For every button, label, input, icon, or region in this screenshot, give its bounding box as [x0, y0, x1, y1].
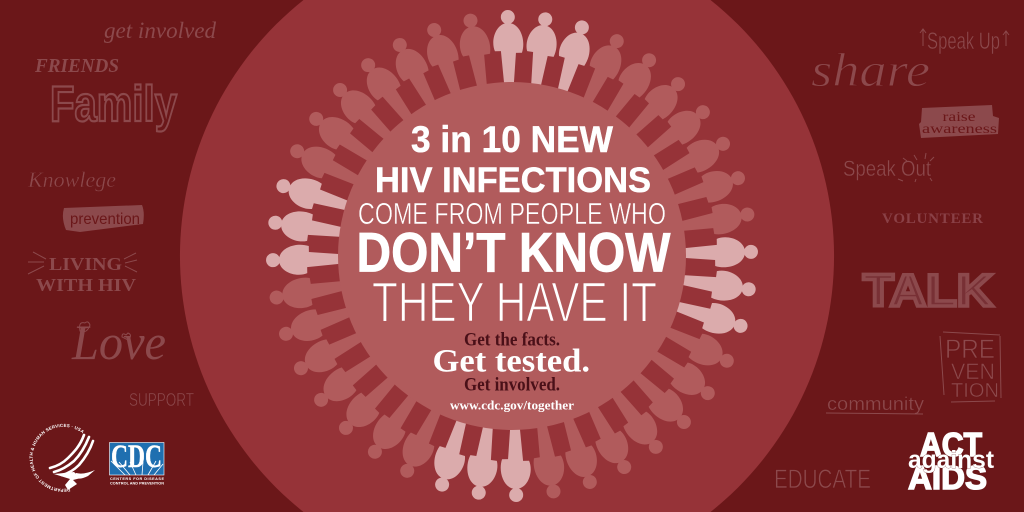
word: raise awareness badge	[919, 105, 999, 138]
word: knowlege: Knowlege	[27, 167, 116, 192]
word: prevention box: PRE	[945, 334, 995, 364]
headline	[356, 119, 671, 334]
word: prevention box: VEN	[951, 359, 995, 384]
word: prevention box	[940, 332, 1001, 402]
word: friends: FRIENDS	[34, 55, 119, 77]
call to action: Get the facts.	[464, 330, 560, 350]
left word cloud	[27, 18, 216, 410]
CDC rays	[111, 461, 163, 475]
word: share: share	[811, 44, 930, 97]
word: get involved: get involved	[104, 18, 216, 43]
call to action: Get involved.	[464, 374, 560, 396]
word: educate: EDUCATE	[774, 464, 871, 494]
word: community: community	[827, 394, 924, 414]
word: speak out: Speak Out	[843, 156, 931, 181]
eagle body	[54, 470, 95, 490]
headline: THEY HAVE IT	[372, 270, 657, 334]
word: family: Family	[50, 76, 177, 132]
headline: DON’T KNOW	[356, 220, 671, 284]
headline: HIV INFECTIONS	[375, 161, 651, 200]
word: prevention badge: prevention	[70, 211, 140, 228]
logo: Act Against AIDS: AIDS	[908, 459, 987, 496]
word: support: SUPPORT	[129, 390, 194, 410]
eagle wing stripes	[50, 435, 93, 475]
call to action: www.cdc.gov/together	[450, 398, 574, 412]
people ring	[266, 10, 758, 502]
logo: Act Against AIDS: ACT	[920, 426, 982, 463]
CDC letters: CDC	[111, 439, 162, 475]
word: prevention badge	[63, 205, 144, 232]
CDC blue square	[110, 442, 164, 475]
right word cloud	[774, 28, 1009, 494]
HHS eagle	[50, 435, 95, 490]
call to action	[432, 330, 590, 412]
logo: Act Against AIDS: against	[908, 446, 995, 474]
word: living with hiv: WITH HIV	[36, 275, 136, 295]
word: raise awareness badge: raise	[942, 110, 976, 125]
logo: Act Against AIDS	[908, 426, 995, 496]
headline: COME FROM PEOPLE WHO	[358, 196, 666, 231]
outer circle	[180, 0, 834, 512]
logo: CDC	[110, 439, 164, 486]
headline: 3 in 10 NEW	[411, 119, 613, 160]
CDC caption line 2: CONTROL AND PREVENTION	[110, 482, 164, 486]
highlighted figures	[266, 10, 758, 502]
word: raise awareness badge: awareness	[922, 122, 997, 137]
inner circle	[338, 82, 686, 430]
word: talk: TALK	[863, 265, 994, 316]
logo: HHS	[30, 424, 95, 492]
CDC caption: CENTERS FOR DISEASE	[110, 477, 164, 481]
medium figures	[267, 11, 757, 501]
word: living with hiv	[28, 252, 137, 295]
HHS ring text: DEPARTMENT OF HEALTH & HUMAN SERVICES · USA	[30, 424, 84, 492]
call to action: Get tested.	[432, 344, 590, 380]
word: love: Love	[71, 314, 166, 370]
word: living with hiv: LIVING	[49, 254, 122, 274]
word: volunteer: VOLUNTEER	[882, 211, 983, 227]
word: prevention box: TION	[951, 380, 999, 402]
